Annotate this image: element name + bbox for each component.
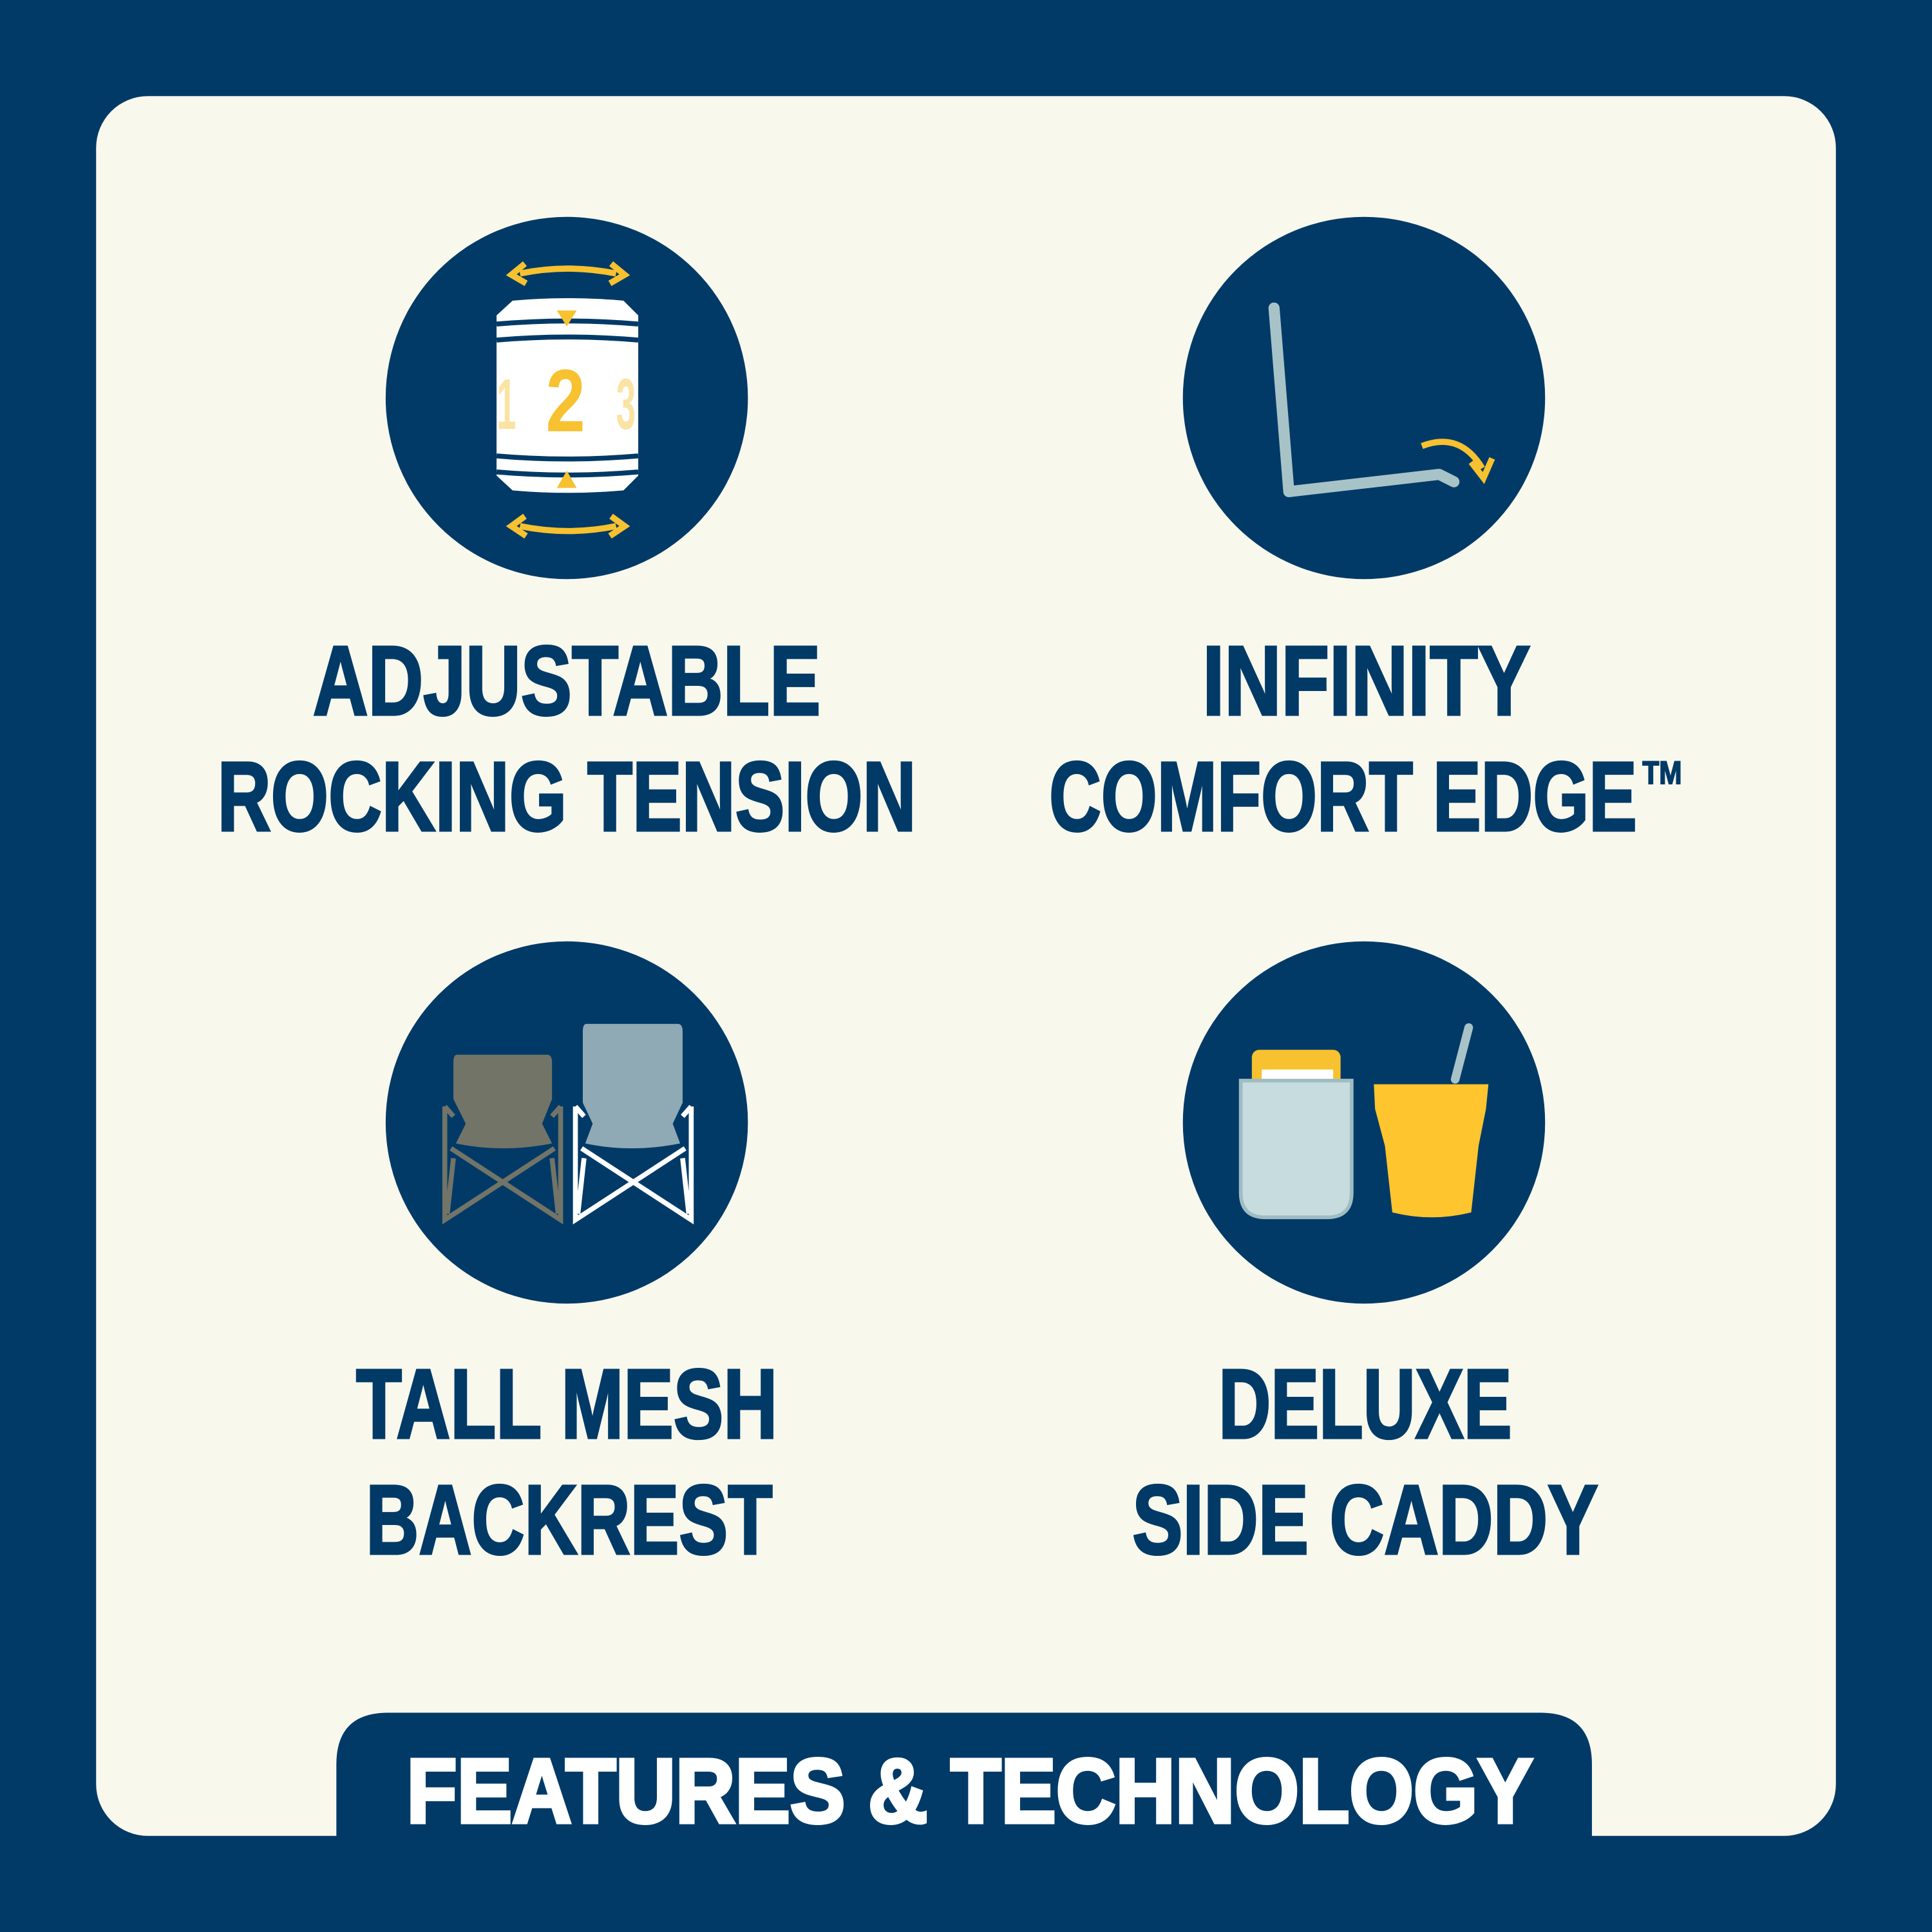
- icon: rocking tension dial: 3: [616, 365, 636, 444]
- text: tall mesh backrest: [356, 1349, 777, 1575]
- panel: title tab: [336, 1712, 1592, 1932]
- icon: rocking tension dial: 2: [546, 352, 585, 451]
- icon: rocking tension dial: [386, 217, 748, 579]
- icon: comfort edge: [1183, 217, 1545, 579]
- icon: mesh backrest chairs: [386, 942, 748, 1303]
- text: infinity comfort edge: COMFORT EDGE: [1049, 742, 1637, 852]
- text: deluxe side caddy: [1132, 1349, 1598, 1575]
- text: adjustable rocking tension: ADJUSTABLE: [313, 626, 820, 736]
- text: deluxe side caddy: SIDE CADDY: [1132, 1465, 1598, 1575]
- text: infinity comfort edge: INFINITY: [1202, 626, 1530, 736]
- text: deluxe side caddy: DELUXE: [1218, 1349, 1512, 1459]
- text: infinity comfort edge: [1049, 626, 1682, 852]
- icon: side caddy: [1183, 942, 1545, 1303]
- text: adjustable rocking tension: [218, 626, 916, 852]
- text: infinity comfort edge: TM: [1642, 755, 1682, 791]
- text: adjustable rocking tension: ROCKING TENSION: [218, 742, 916, 852]
- text: tall mesh backrest: BACKREST: [366, 1465, 773, 1575]
- text: tall mesh backrest: TALL MESH: [356, 1349, 777, 1459]
- icon: rocking tension dial: 1: [497, 365, 516, 444]
- title: FEATURES & TECHNOLOGY: [406, 1741, 1533, 1842]
